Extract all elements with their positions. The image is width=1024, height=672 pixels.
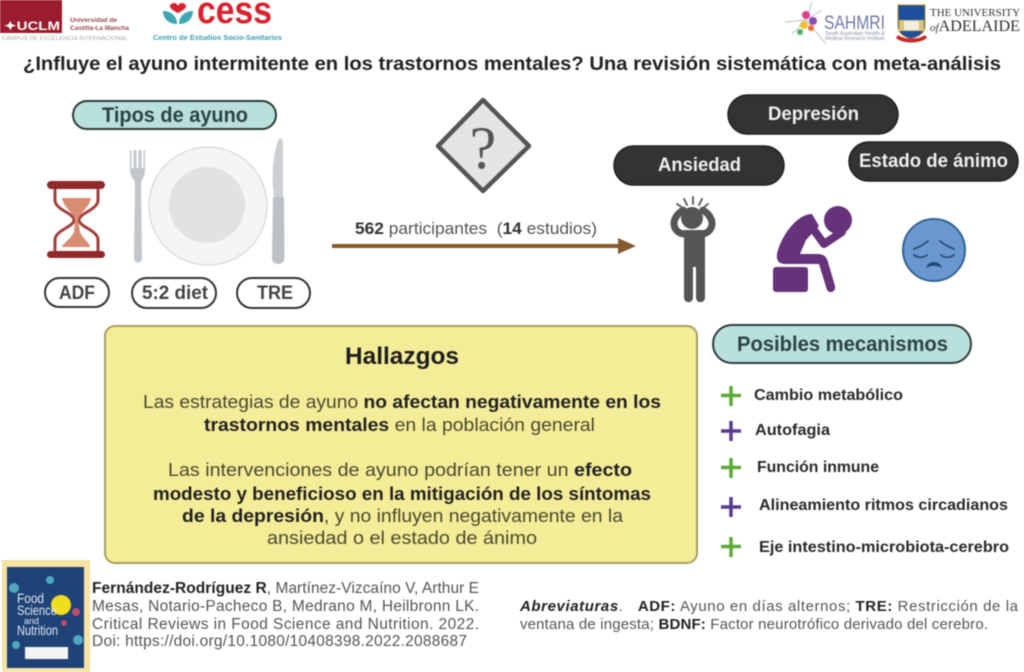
panel: Hallazgos xyxy=(105,326,697,563)
item: Cambio metabólico xyxy=(721,386,903,406)
finding 2: de la depresión , y no influyen negativamente en la xyxy=(182,505,624,526)
study count text: 562 participantes (14 estudios) xyxy=(355,219,597,238)
icon: knife xyxy=(272,139,284,264)
finding 1: trastornos mentales en la población general xyxy=(204,414,595,435)
icon: plate xyxy=(149,147,267,265)
abbreviations: ventana de ingesta; BDNF: Factor neurotrófico derivado del cerebro. xyxy=(520,616,988,633)
heading pill: Tipos de ayuno xyxy=(73,101,276,129)
item: Función inmune: Función inmune xyxy=(757,459,879,476)
journal cover: Nutrition xyxy=(17,622,58,638)
icon: question diamond: ? xyxy=(470,115,496,181)
logo: cess xyxy=(153,0,282,42)
heading pill: Posibles mecanismos: Posibles mecanismos xyxy=(737,333,948,356)
logo: SAHMRI: SAHMRI xyxy=(824,13,885,34)
label pill: 5:2 diet: 5:2 diet xyxy=(142,283,209,304)
journal cover: Science xyxy=(17,602,57,618)
item: Autofagia xyxy=(721,421,830,441)
citation: Fernández-Rodríguez R, Martínez-Vizcaíno V, Arthur E xyxy=(92,580,479,597)
icon: sad face xyxy=(903,219,965,281)
finding 1 xyxy=(143,391,661,435)
arrow xyxy=(332,238,636,254)
heading: Hallazgos: Hallazgos xyxy=(345,343,459,370)
citation: Doi: https://doi.org/10.1080/10408398.2022.2088687 xyxy=(92,633,467,650)
title: ¿Influye el ayuno intermitente en los trastornos mentales? Una revisión sistemática con meta-análisis xyxy=(23,53,1001,75)
citation: Critical Reviews in Food Science and Nutrition. 2022. xyxy=(92,616,479,633)
abbreviations xyxy=(519,598,1019,633)
heading pill: Tipos de ayuno: Tipos de ayuno xyxy=(102,104,248,127)
label pill: TRE: TRE xyxy=(257,283,293,304)
pill: Depresión: Depresión xyxy=(768,104,859,125)
logo: University of Adelaide: THE UNIVERSITY xyxy=(930,8,1020,19)
label pill: ADF: ADF xyxy=(59,283,95,304)
finding 2: modesto y beneficioso en la mitigación de los síntomas xyxy=(153,483,651,504)
logo: University of Adelaide: ofADELAIDE xyxy=(930,18,1020,35)
label pill: 5:2 diet xyxy=(132,278,216,308)
icon: anxious person xyxy=(674,197,712,302)
pill: Ansiedad: Ansiedad xyxy=(658,155,741,176)
item: Función inmune xyxy=(721,458,879,478)
pill: Ansiedad xyxy=(614,146,784,185)
item: Cambio metabólico: Cambio metabólico xyxy=(754,387,903,404)
item: Autofagia: Autofagia xyxy=(755,422,830,439)
logo: UCLM: Universidad de xyxy=(70,17,117,24)
pill: Estado de ánimo xyxy=(849,142,1018,181)
icon: question diamond xyxy=(438,100,529,191)
citation: Mesas, Notario-Pacheco B, Medrano M, Heilbronn LK. xyxy=(92,598,479,615)
pill: Estado de ánimo: Estado de ánimo xyxy=(859,151,1008,172)
icon: depressed person xyxy=(773,206,852,292)
abbreviations: Abreviaturas. ADF: Ayuno en días alternos; TRE: Restricción de la xyxy=(519,598,1019,615)
finding 2 xyxy=(153,459,651,548)
finding 2: Las intervenciones de ayuno podrían tener un efecto xyxy=(168,459,632,480)
logo: SAHMRI xyxy=(785,2,886,44)
logo: UCLM: ✦UCLM xyxy=(4,19,60,33)
heading pill: Posibles mecanismos xyxy=(713,325,971,363)
item: Eje intestino-microbiota-cerebro: Eje intestino-microbiota-cerebro xyxy=(759,539,1009,556)
logo: University of Adelaide xyxy=(896,5,1020,42)
icon: hourglass xyxy=(47,181,105,258)
pill: Depresión xyxy=(728,95,898,134)
logo: cess: Centro de Estudios Socio-Sanitarios xyxy=(153,33,282,42)
icon: fork xyxy=(130,150,145,262)
journal cover: and xyxy=(24,616,39,626)
finding 2: ansiedad o el estado de ánimo xyxy=(267,527,537,548)
logo: UCLM: CAMPUS DE EXCELENCIA INTERNACIONAL xyxy=(2,36,128,42)
item: Alineamiento ritmos circadianos: Alineamiento ritmos circadianos xyxy=(759,497,1008,514)
list: mecanismos xyxy=(721,386,1009,557)
label pill: ADF xyxy=(45,278,109,307)
journal cover: Food xyxy=(17,590,44,606)
logo: SAHMRI: Medical Research Institute xyxy=(825,36,885,42)
label pill: TRE xyxy=(237,278,310,308)
citation xyxy=(92,580,479,650)
logo: UCLM: Castilla-La Mancha xyxy=(70,25,129,32)
logo: UCLM xyxy=(0,0,129,42)
finding 1: Las estrategias de ayuno no afectan negativamente en los xyxy=(143,391,661,412)
logo: SAHMRI: South Australian Health & xyxy=(825,31,886,37)
journal cover xyxy=(2,560,90,672)
